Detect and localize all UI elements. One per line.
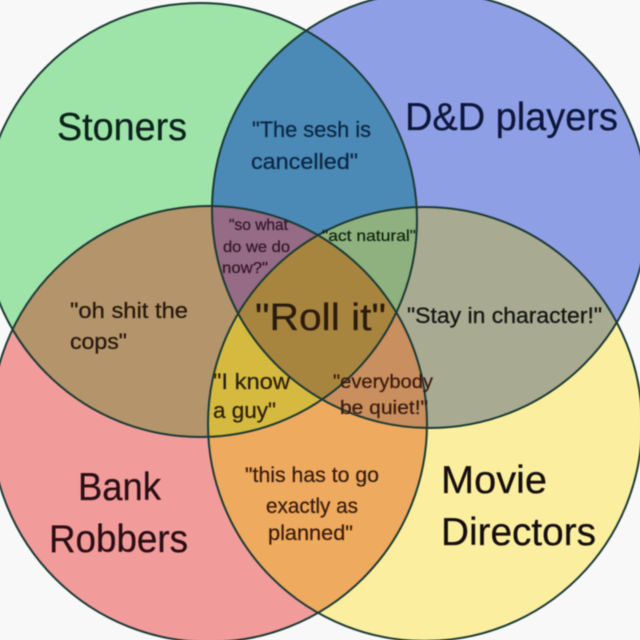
overlap: Stoners, D&D, Robbers [212, 206, 316, 312]
text: this has to go exactly as planned: "this has to go [245, 464, 379, 487]
text: this has to go exactly as planned: exactly as [266, 495, 358, 518]
text: the sesh is cancelled: cancelled" [251, 149, 358, 174]
text: so what do we do now: now?" [222, 260, 268, 277]
heading: Stoners: Stoners [57, 106, 187, 149]
text: so what do we do now [222, 217, 290, 277]
text: i know a guy: a guy" [213, 398, 276, 423]
text: oh shit the cops [70, 298, 188, 354]
text: oh shit the cops: cops" [70, 329, 127, 354]
overlap: Stoners and D&D [212, 32, 416, 234]
text: roll it: "Roll it" [255, 297, 386, 339]
text: oh shit the cops: "oh shit the [70, 298, 188, 323]
heading: Bank Robbers [49, 466, 188, 561]
heading: Movie Directors: Directors [441, 511, 596, 554]
text: this has to go exactly as planned [245, 464, 379, 545]
heading: Bank Robbers: Robbers [49, 518, 188, 561]
text: everybody be quiet [333, 372, 434, 419]
overlap: D&D, Robbers, Directors [324, 314, 426, 428]
overlap: Robbers and Directors [209, 400, 426, 612]
labels [49, 96, 618, 561]
overlap: Stoners, D&D, Directors [320, 208, 416, 310]
heading: Movie Directors [441, 459, 596, 554]
circle: Bank Robbers [0, 206, 427, 640]
text: everybody be quiet: be quiet!" [340, 398, 428, 419]
overlap: Stoners, Robbers, Directors [208, 316, 320, 436]
circle: Stoners [0, 3, 417, 437]
overlap: D&D and Directors [397, 208, 616, 428]
text: so what do we do now: do we do [223, 239, 290, 256]
heading: D&D players: D&D players [405, 96, 618, 139]
text: so what do we do now: "so what [229, 217, 289, 234]
heading: Bank Robbers: Bank [78, 466, 161, 509]
text: i know a guy [213, 369, 290, 423]
text: this has to go exactly as planned: planned" [268, 522, 353, 545]
text: the sesh is cancelled [251, 117, 371, 174]
circle: D&D players [212, 0, 640, 428]
overlap: all four [239, 236, 396, 398]
text: the sesh is cancelled: "The sesh is [252, 117, 371, 142]
circle: Movie Directors [208, 207, 640, 640]
text: i know a guy: "I know [213, 369, 290, 394]
text: stay in character: "Stay in character!" [407, 303, 602, 328]
text: everybody be quiet: "everybody [333, 372, 434, 393]
text: act natural: "act natural" [322, 228, 416, 245]
overlap: Stoners and Robbers [14, 206, 238, 436]
heading: Movie Directors: Movie [441, 459, 547, 502]
